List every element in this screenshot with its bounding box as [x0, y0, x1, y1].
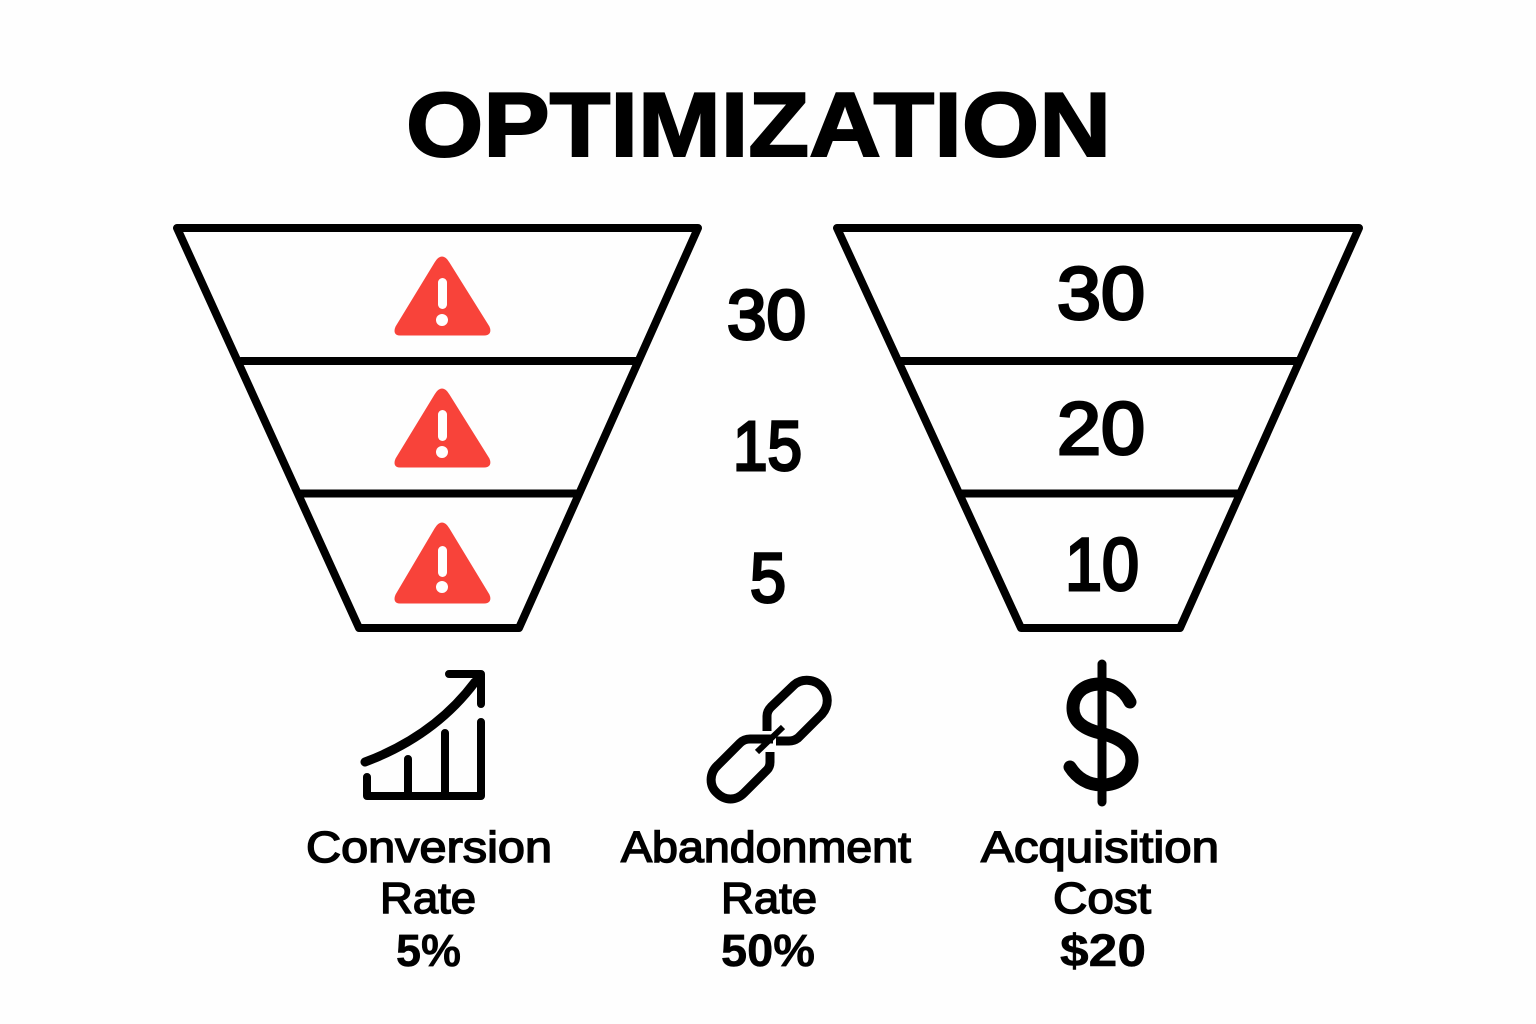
number 30: 30 — [1057, 252, 1145, 335]
label: Rate — [721, 874, 817, 923]
metric: acquisition cost — [981, 823, 1219, 976]
label: Conversion — [306, 823, 552, 872]
left funnel with warnings — [177, 228, 698, 628]
value: 50% — [721, 925, 815, 976]
icon: warning triangle top — [396, 258, 489, 334]
title: OPTIMIZATION — [406, 75, 1111, 176]
icon: growth chart — [365, 674, 481, 796]
value: $20 — [1060, 925, 1146, 976]
icon: warning triangle bottom — [396, 524, 489, 602]
number 5: 5 — [750, 539, 786, 617]
icon: warning triangle middle — [396, 390, 489, 466]
label — [306, 823, 552, 923]
label: Cost — [1053, 874, 1151, 923]
label — [981, 823, 1219, 923]
number 10: 10 — [1065, 523, 1139, 606]
label: Rate — [380, 874, 476, 923]
label — [621, 823, 911, 923]
value: 5% — [396, 925, 461, 976]
label: Acquisition — [981, 823, 1219, 872]
icon: broken chain link — [711, 680, 827, 799]
funnel outline: left — [177, 228, 698, 628]
number 20: 20 — [1057, 387, 1145, 470]
right funnel with numbers — [837, 228, 1359, 628]
center numbers — [727, 276, 806, 617]
metric: abandonment rate — [621, 823, 911, 976]
metric: conversion rate — [306, 823, 552, 976]
icon: dollar sign — [1070, 664, 1132, 802]
funnel outline: right — [837, 228, 1359, 628]
label: Abandonment — [621, 823, 911, 872]
number 30: 30 — [727, 276, 806, 354]
number 15: 15 — [733, 407, 802, 485]
